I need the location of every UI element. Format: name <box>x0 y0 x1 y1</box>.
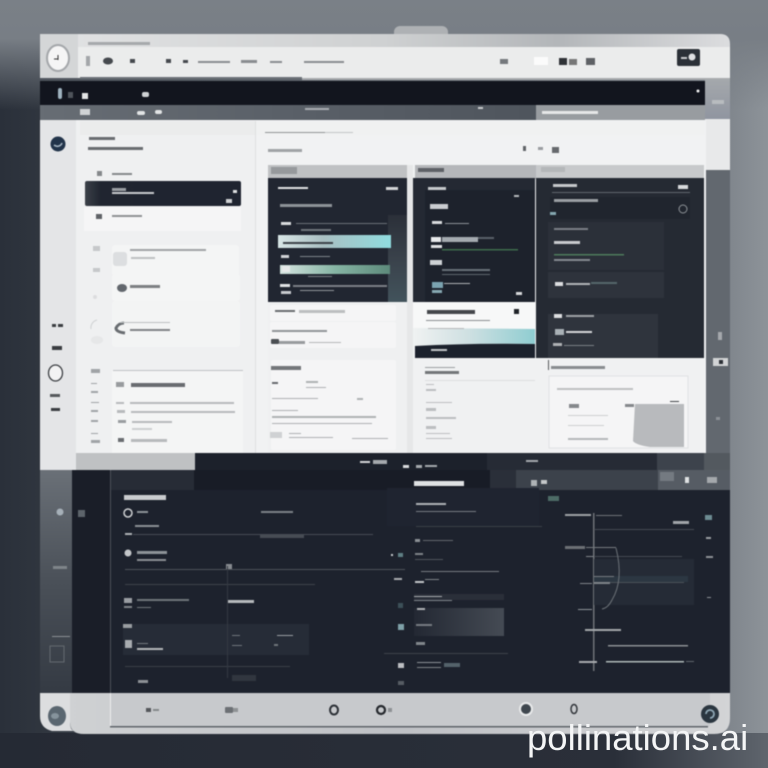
nested card three <box>548 314 658 358</box>
toolbar title <box>88 42 150 45</box>
bottom toolbar items <box>146 707 238 713</box>
lower right labels <box>548 496 713 598</box>
toolbar right icons <box>500 57 595 65</box>
column heading <box>88 137 143 150</box>
toolbar left icons <box>86 56 188 66</box>
icon: dark dot button <box>520 703 532 715</box>
line chart <box>565 513 694 671</box>
list header row <box>97 171 132 176</box>
narrow gap strip <box>407 165 413 453</box>
window handle tab <box>394 26 448 42</box>
icon: blue circle <box>50 136 66 152</box>
data card with chart block <box>536 358 704 453</box>
sidebar bottom icons <box>50 394 60 411</box>
dark panel B <box>413 165 536 302</box>
main content surface <box>76 120 706 453</box>
column header strip <box>256 121 705 153</box>
icon: ring button with label <box>377 706 392 714</box>
lower middle list <box>384 488 542 685</box>
icon: ring button <box>330 706 338 714</box>
lower dashboard panel <box>110 470 730 695</box>
dark panel A <box>268 165 407 302</box>
green highlighted row <box>280 265 390 274</box>
cyan highlighted row <box>278 235 391 248</box>
column one <box>76 121 256 453</box>
lower-left grey rail <box>40 470 72 695</box>
lower left list <box>123 495 405 683</box>
left sidebar <box>40 120 76 470</box>
sidebar mini icons <box>52 324 63 350</box>
secondary grey band <box>40 105 706 121</box>
list row one <box>84 207 241 231</box>
gradient feature block <box>414 608 504 636</box>
nested card one <box>548 222 664 270</box>
selected list row <box>85 181 241 206</box>
column divider line <box>255 121 256 453</box>
icon: small oval <box>571 704 577 714</box>
icon: outlined circle <box>48 365 62 381</box>
icon: swirl orb <box>701 705 719 723</box>
list card two <box>84 231 239 276</box>
light card below callout <box>413 358 536 453</box>
list card three <box>93 268 240 301</box>
icon: account badge <box>677 49 700 66</box>
nested card two <box>548 272 664 298</box>
toolbar menu items <box>198 60 344 63</box>
callout card with cyan wave <box>413 302 535 358</box>
header action icons <box>523 146 559 153</box>
details card <box>91 369 243 453</box>
bottom toolbar <box>40 693 730 734</box>
top toolbar <box>40 34 730 80</box>
dark sub-rail <box>72 470 110 695</box>
heat block <box>633 404 684 447</box>
middle dark strip <box>76 453 730 471</box>
light cards below panel A <box>268 302 407 453</box>
right utility rail <box>704 80 730 470</box>
watermark: pollinations.ai <box>527 717 748 758</box>
dark panel C <box>536 165 704 358</box>
list card four <box>91 295 240 347</box>
dark navigation bar <box>40 81 705 106</box>
icon: clock badge <box>47 45 69 71</box>
icon: bottom left orb <box>48 706 66 726</box>
lower header strip <box>78 470 730 490</box>
